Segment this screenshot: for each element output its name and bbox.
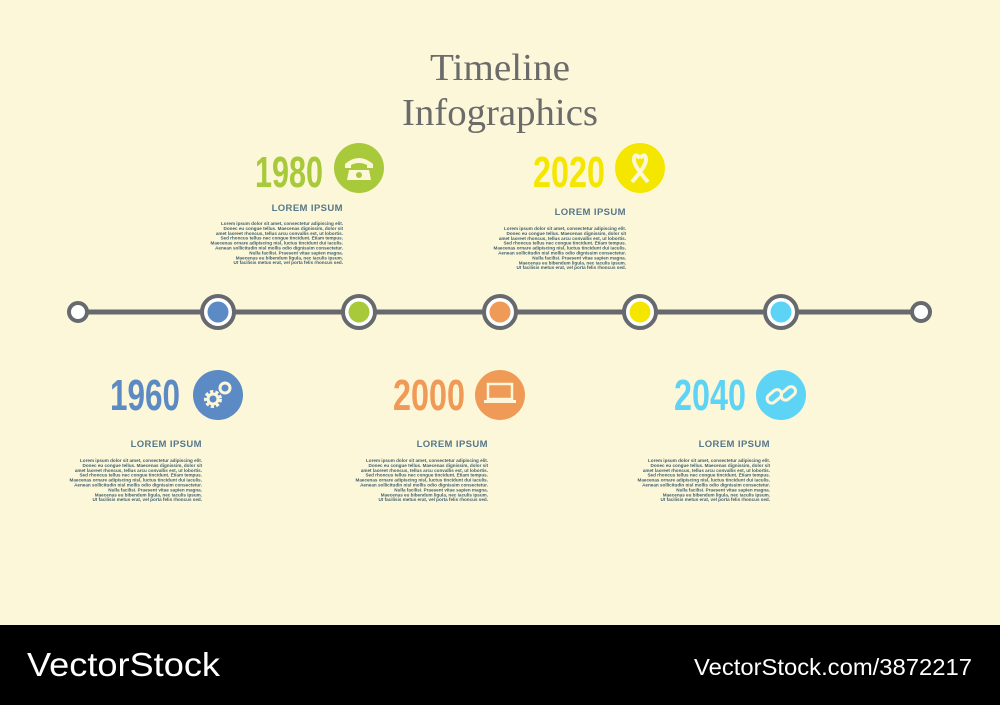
title [402,47,598,134]
item 2020 [494,143,665,270]
item 1960 [70,370,243,502]
item 1980: LOREM IPSUM [272,203,343,214]
item 2020: 2020 [533,148,605,197]
item 2000 [356,370,525,502]
item 2040: LOREM IPSUM [699,439,770,450]
item 1980 [211,143,384,265]
item 2000: LOREM IPSUM [417,439,488,450]
icon: phone [334,143,384,193]
icon: laptop [475,370,525,420]
item 2000: 2000 [393,371,465,420]
icon: ribbon [615,143,665,193]
item 2020: LOREM IPSUM [555,207,626,218]
item 1960: LOREM IPSUM [131,439,202,450]
item 1980: 1980 [255,148,323,197]
title: Timeline [430,47,570,89]
footer bar: VectorStock [27,646,221,683]
title: Infographics [402,92,598,134]
item 2040: 2040 [674,371,746,420]
icon: gears [193,370,243,420]
footer bar: VectorStock.com/3872217 [694,654,972,680]
item 2040 [638,370,806,502]
timeline line [69,296,930,328]
item 1960: 1960 [110,371,180,420]
footer bar [0,625,1000,705]
icon: chain link [756,370,806,420]
